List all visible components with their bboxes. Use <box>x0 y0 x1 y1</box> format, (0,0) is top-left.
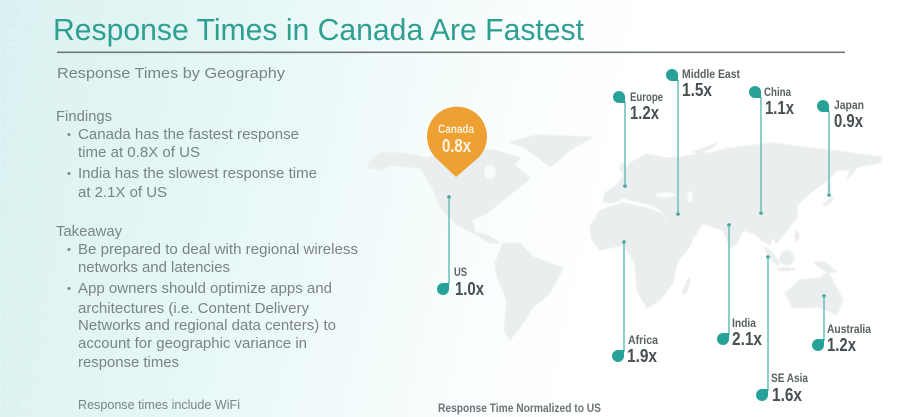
pin: Japan <box>817 98 864 197</box>
pin: China: 1.1x <box>765 98 794 118</box>
text block: takeaway <box>56 224 358 371</box>
pin: Africa: Africa <box>628 333 658 347</box>
text block: takeaway: networks and latencies <box>78 260 230 276</box>
text block: findings: time at 0.8X of US <box>78 145 200 161</box>
pin: India: 2.1x <box>732 329 762 349</box>
text block: takeaway: App owners should optimize apps and <box>78 281 332 297</box>
subheading: Response Times by Geography <box>57 65 286 82</box>
pin: Japan: 0.9x <box>834 111 863 131</box>
pin: Australia <box>812 294 871 355</box>
text block: findings: Canada has the fastest response <box>78 127 299 143</box>
pin: Australia: Australia <box>827 322 871 336</box>
pin: Europe <box>613 90 663 188</box>
text block: takeaway: Takeaway <box>56 224 123 240</box>
text block: takeaway: account for geographic variance in <box>78 336 307 352</box>
pin: Japan: Japan <box>834 98 864 112</box>
pin: Australia: 1.2x <box>827 335 856 355</box>
pin: Middle East: 1.5x <box>682 80 712 100</box>
pin: Europe: 1.2x <box>630 103 659 123</box>
text block: takeaway: response times <box>78 355 179 371</box>
pin: Europe: Europe <box>630 90 663 104</box>
world map <box>368 135 882 340</box>
text block: findings <box>56 109 317 201</box>
title: Response Times in Canada Are Fastest <box>53 12 584 47</box>
pin: Canada <box>427 107 487 177</box>
pin: India <box>717 223 762 349</box>
text block: takeaway: Be prepared to deal with regional wireless <box>78 242 358 258</box>
pin: Africa <box>612 240 658 366</box>
text block: takeaway: Networks and regional data centers) to <box>78 318 336 334</box>
pin: Middle East <box>666 67 740 216</box>
pin: US <box>437 195 484 299</box>
text block: findings: India has the slowest response time <box>78 166 317 182</box>
text block: takeaway: architectures (i.e. Content Delivery <box>78 301 310 317</box>
text block: findings: Findings <box>56 109 112 125</box>
pin: US: US <box>454 265 467 279</box>
pin: US: 1.0x <box>455 279 484 299</box>
pin: SE Asia: 1.6x <box>772 385 802 405</box>
map caption: Response Time Normalized to US <box>438 401 601 415</box>
pin: Canada: 0.8x <box>442 136 471 156</box>
pin: Middle East: Middle East <box>682 67 740 81</box>
pin: India: India <box>732 316 756 330</box>
pin: China <box>749 85 794 215</box>
text block: findings: at 2.1X of US <box>78 185 167 201</box>
footnote: wifi: Response times include WiFi <box>78 398 240 412</box>
pin: China: China <box>764 85 791 99</box>
pin: SE Asia: SE Asia <box>771 371 808 385</box>
pin: SE Asia <box>756 255 808 405</box>
pin: Africa: 1.9x <box>627 346 657 366</box>
pin: Canada: Canada <box>438 122 474 136</box>
